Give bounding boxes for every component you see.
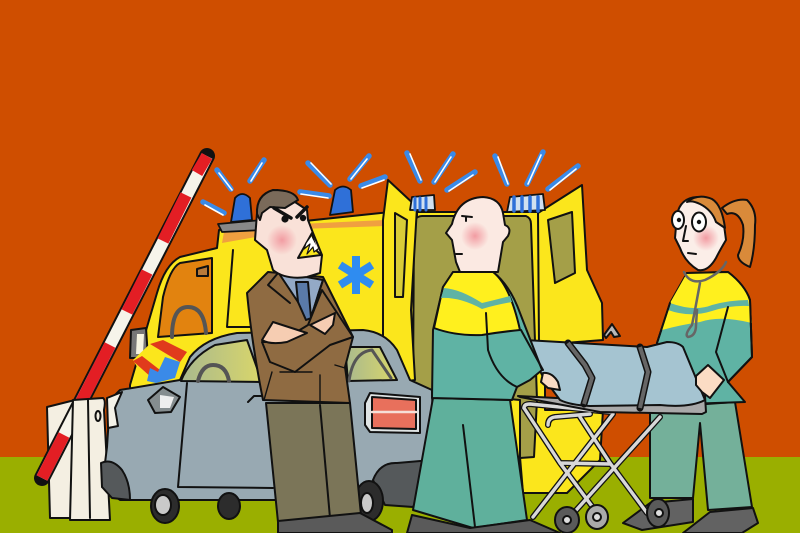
paramedic: jacket	[432, 272, 542, 400]
man: folded arms	[262, 290, 353, 372]
car: white headlight	[107, 392, 122, 428]
nurse: eyes	[672, 211, 706, 232]
man: jacket	[247, 272, 353, 403]
man: cheek	[267, 225, 297, 255]
trolley: frame	[524, 404, 660, 517]
man: head	[255, 190, 322, 278]
grey car	[101, 330, 434, 523]
paramedic: arm line	[486, 313, 543, 387]
flashing light rays	[203, 152, 578, 215]
bag: tray	[518, 396, 706, 414]
car: front window	[181, 340, 262, 382]
ambulance	[130, 180, 620, 493]
ambulance: left rear door	[383, 180, 417, 385]
nurse: stethoscope	[684, 262, 726, 337]
nurse: cheek	[693, 225, 719, 251]
man: hair	[257, 190, 298, 220]
nurse: hand on bag	[696, 365, 724, 398]
ambulance: door hinge	[604, 324, 620, 338]
man: open mouth	[298, 233, 321, 258]
nurse right	[623, 197, 758, 533]
trolley: wheels	[555, 499, 669, 533]
bag: straps	[568, 343, 648, 408]
paramedic: trousers	[413, 398, 527, 528]
nurse: hair	[687, 197, 725, 228]
nurse: trousers	[650, 402, 752, 510]
man: trousers	[266, 403, 361, 522]
ambulance: rear frame	[415, 212, 603, 493]
stretcher trolley	[524, 404, 669, 533]
paramedic: hand	[541, 373, 560, 390]
blue roof lights	[218, 186, 545, 232]
nurse: shoes	[623, 499, 758, 533]
man: shirt and tie	[278, 272, 323, 320]
ambulance: right rear door	[538, 185, 603, 345]
paramedic front	[407, 197, 560, 533]
nurse: head	[675, 197, 726, 270]
ambulance: cab and body	[130, 212, 415, 400]
paramedic: yellow sections	[434, 272, 520, 335]
car: rear window	[345, 347, 397, 381]
star of life	[340, 256, 372, 294]
ambulance: interior	[413, 216, 537, 458]
man: shoes	[278, 513, 392, 533]
ambulance: side mirror	[130, 328, 148, 358]
car: door line	[178, 383, 273, 488]
bag: shape	[525, 340, 705, 406]
man: eyes and brows	[274, 207, 307, 218]
barrier post back	[47, 400, 80, 518]
car: front wheel arch	[101, 462, 130, 500]
ambulance: chevron markings	[133, 340, 187, 384]
paramedic: shoes	[407, 515, 560, 533]
car: rear wheel arch	[373, 460, 432, 507]
nurse: jacket	[655, 272, 752, 405]
car: body	[102, 330, 434, 500]
angry man in brown suit	[247, 190, 392, 533]
paramedic: head	[446, 197, 509, 272]
nurse: ponytail	[722, 200, 755, 267]
barrier post front	[70, 398, 110, 520]
ambulance: orange stripe	[222, 220, 385, 243]
ambulance: cab window	[158, 258, 212, 337]
car: wheels	[151, 489, 179, 523]
car: wing mirror	[148, 387, 180, 413]
car: tail light	[365, 393, 420, 433]
barrier arm	[42, 156, 207, 478]
nurse: yellow band	[662, 272, 752, 330]
man: hands	[262, 313, 335, 343]
patient body bag	[518, 340, 724, 414]
ground	[0, 457, 800, 533]
